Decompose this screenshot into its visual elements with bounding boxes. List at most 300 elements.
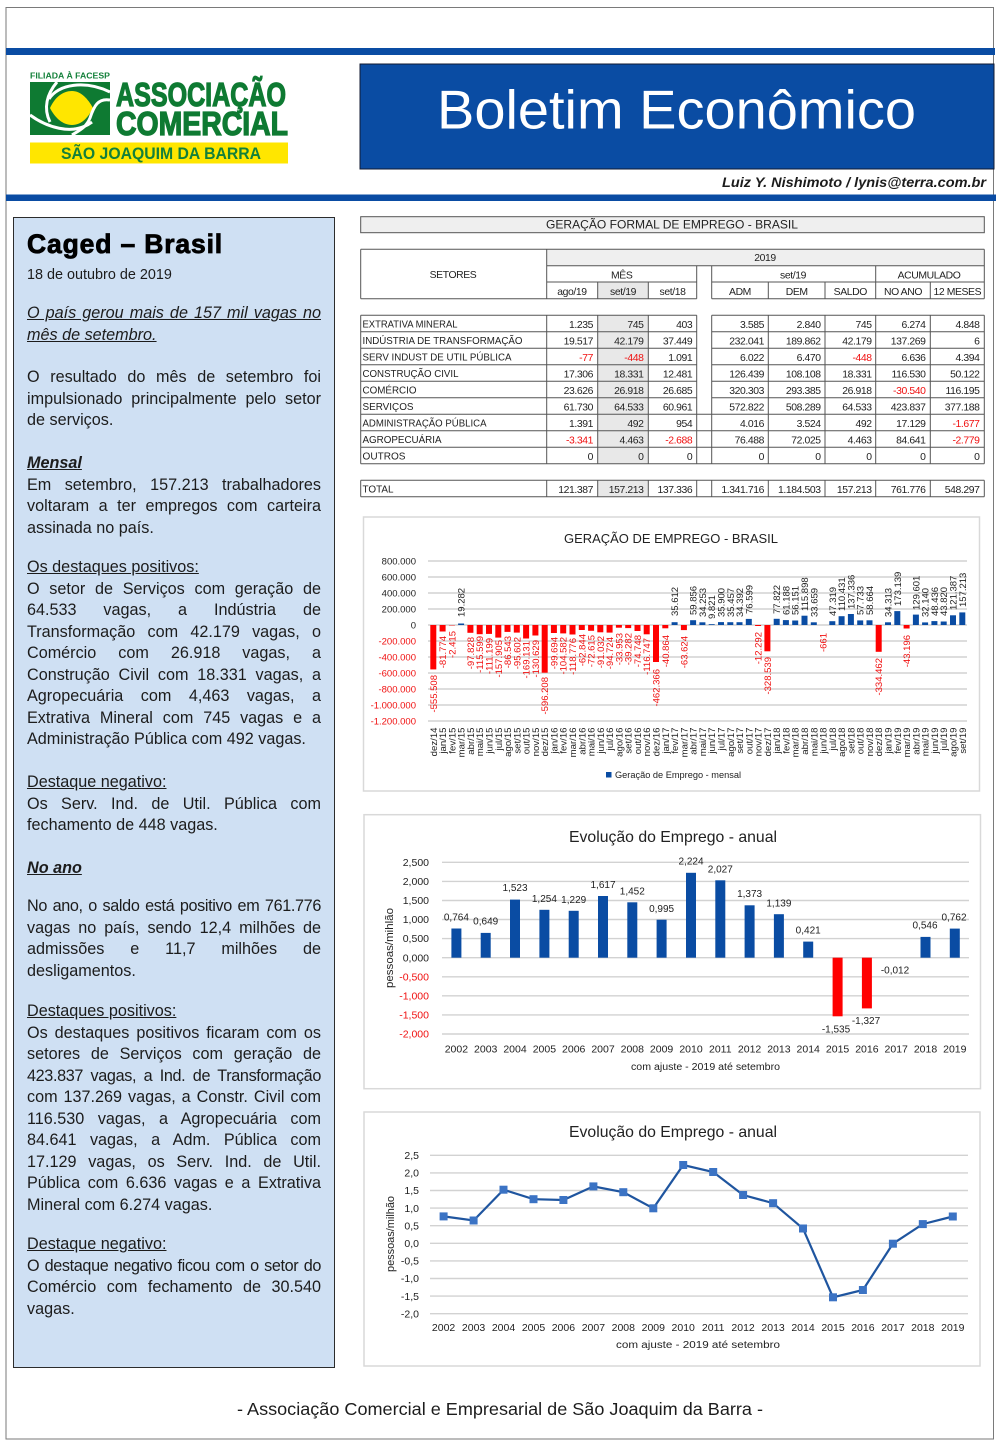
table body: -2.688 xyxy=(665,436,693,446)
month axis labels: nov/15 xyxy=(531,728,542,756)
month axis labels: jul/19 xyxy=(939,728,950,751)
chart note: com ajuste - 2019 até setembro xyxy=(631,1062,780,1073)
month axis labels: dez/18 xyxy=(874,728,885,756)
title banner xyxy=(360,64,994,169)
table body: 1.184.503 xyxy=(778,485,821,496)
table header: ago/19 xyxy=(557,287,587,298)
table header: DEM xyxy=(786,287,808,298)
table body: -30.540 xyxy=(893,386,926,397)
text block: yearly summary xyxy=(27,897,321,980)
positive data labels: 59.856 xyxy=(689,586,700,615)
table body: 4.016 xyxy=(740,419,765,430)
y axis labels: -1,5 xyxy=(401,1291,419,1303)
table body: SERV INDUST DE UTIL PÚBLICA xyxy=(362,350,512,364)
y axis labels: -200.000 xyxy=(378,636,416,648)
table body: 492 xyxy=(856,419,872,430)
y axis labels: -2,000 xyxy=(399,1028,429,1040)
y axis labels: 0,500 xyxy=(403,933,429,945)
logo: Associação Comercial xyxy=(30,70,288,164)
positive data labels: 110.431 xyxy=(837,577,848,611)
text block: monthly negative highlight: Destaque negativo: xyxy=(27,773,166,791)
month axis labels: fev/19 xyxy=(893,728,904,754)
data labels: -0,012 xyxy=(881,966,910,976)
negative data labels: -118.776 xyxy=(568,638,579,675)
chart title: GERAÇÃO DE EMPREGO - BRASIL xyxy=(564,531,778,546)
negative data labels: -111.199 xyxy=(484,638,496,674)
table body: TOTAL xyxy=(362,484,394,496)
y axis labels: 600.000 xyxy=(382,572,416,584)
year axis labels: 2018 xyxy=(911,1322,935,1334)
table body: EXTRATIVA MINERAL xyxy=(362,320,458,330)
month axis labels: jul/18 xyxy=(828,728,839,751)
data labels: 0,546 xyxy=(912,920,938,932)
y axis labels xyxy=(371,556,416,728)
positive data labels: 35.612 xyxy=(670,587,681,616)
panel: annual employment line chart xyxy=(364,1112,980,1366)
y axis labels: -800.000 xyxy=(378,684,416,696)
year axis labels xyxy=(432,1322,965,1334)
table body: 12.481 xyxy=(663,370,693,380)
y axis labels: -1.200.000 xyxy=(371,716,416,728)
table body: 403 xyxy=(676,320,693,331)
negative data labels: -104.582 xyxy=(559,637,570,675)
year axis labels: 2009 xyxy=(650,1044,673,1056)
author credit: Luiz Y. Nishimoto / lynis@terra.com.br xyxy=(722,174,988,190)
positive data labels: 34.392 xyxy=(735,588,746,617)
table body: 6 xyxy=(974,336,980,348)
positive bars xyxy=(451,873,960,958)
table body: 1.391 xyxy=(569,419,594,430)
text block: yearly positive highlights: 116.530 vagas, a Agropecuária com xyxy=(27,1110,321,1128)
positive data labels: 58.664 xyxy=(865,586,876,615)
month axis labels: out/15 xyxy=(522,728,533,754)
table body: 157.213 xyxy=(609,485,644,496)
month axis labels: abr/15 xyxy=(466,728,477,755)
table body: 18.331 xyxy=(614,370,644,380)
year axis labels: 2006 xyxy=(562,1044,586,1056)
y axis labels: 400.000 xyxy=(382,588,416,600)
text block: monthly positive highlights: 64.533 vagas, a Indústria de xyxy=(27,601,321,619)
table body: COMÉRCIO xyxy=(362,384,416,396)
negative data labels: -12.292 xyxy=(754,632,765,664)
table body: 17.129 xyxy=(896,419,926,430)
y axis labels: -0,5 xyxy=(401,1256,419,1268)
table body: 0 xyxy=(920,452,926,463)
text block: monthly positive highlights: Comércio com 26.918 vagas, a xyxy=(27,644,321,662)
positive data labels xyxy=(457,572,969,619)
positive data labels: 19.282 xyxy=(457,588,468,617)
data labels: 1,523 xyxy=(502,883,528,894)
y axis labels: -1,500 xyxy=(399,1010,429,1022)
panel: Caged Brasil text xyxy=(13,217,335,1368)
negative data labels: -63.624 xyxy=(679,636,690,668)
text block: lead: O país gerou mais de 157 mil vagas no xyxy=(27,304,321,322)
text block: mensal: Em setembro, 157.213 trabalhadores xyxy=(27,476,321,494)
table body xyxy=(361,315,984,497)
data labels: 1,452 xyxy=(620,886,645,898)
text block: yearly positive highlights: 17.129 vagas, os Serv. Ind. de Util. xyxy=(27,1153,321,1171)
negative data labels: -116.747 xyxy=(642,638,653,675)
y axis labels: 0 xyxy=(411,620,416,632)
table body: ADMINISTRAÇÃO PÚBLICA xyxy=(362,416,487,430)
data labels: 0,421 xyxy=(796,926,821,936)
positive data labels: 77.822 xyxy=(772,585,783,614)
text block: yearly negative highlight: O destaque negativo ficou com o setor do xyxy=(27,1257,321,1275)
negative data labels: -74.748 xyxy=(633,635,644,667)
year axis labels: 2013 xyxy=(761,1322,785,1334)
table body: 745 xyxy=(627,320,644,331)
month axis labels: jan/18 xyxy=(772,728,783,755)
positive data labels: 47.319 xyxy=(828,587,839,616)
text block: yearly positive highlights: com 137.269 vagas, a Constr. Civil com xyxy=(27,1088,321,1106)
table body: 76.488 xyxy=(735,436,765,446)
y axis labels: 2,000 xyxy=(403,876,429,888)
positive data labels: 61.188 xyxy=(781,586,792,615)
month axis labels: fev/17 xyxy=(670,728,681,754)
month axis labels: abr/18 xyxy=(800,728,811,755)
month axis labels: jul/17 xyxy=(716,728,728,751)
text block: monthly negative highlight: Os Serv. Ind. de Util. Pública com xyxy=(27,795,321,813)
year axis labels: 2014 xyxy=(797,1044,820,1056)
year axis labels: 2004 xyxy=(503,1044,527,1056)
table body: 3.585 xyxy=(740,320,765,331)
month axis labels: ago/15 xyxy=(503,728,514,757)
month axis labels xyxy=(429,727,969,757)
y axis labels: 2,5 xyxy=(404,1150,419,1162)
table body: 108.108 xyxy=(786,370,821,380)
negative data labels: -43.196 xyxy=(902,635,913,667)
title banner: Boletim Econômico xyxy=(437,78,916,140)
negative data labels: -555.508 xyxy=(429,675,440,713)
negative data labels: -596.208 xyxy=(540,677,551,715)
negative data labels: -169.131 xyxy=(522,641,533,679)
data labels xyxy=(444,856,967,1036)
panel: bar chart geração de emprego mensal xyxy=(364,517,980,791)
table header: ACUMULADO xyxy=(898,270,961,282)
y axis labels: 0,000 xyxy=(403,952,429,964)
month axis labels: ago/19 xyxy=(948,728,960,757)
year axis labels: 2011 xyxy=(709,1044,732,1056)
text block: monthly positive highlights: O setor de Serviços com geração de xyxy=(27,580,321,598)
negative data labels: -157.905 xyxy=(494,640,505,678)
year axis labels: 2011 xyxy=(702,1322,725,1334)
month axis labels: out/17 xyxy=(744,728,755,754)
table body: 18.331 xyxy=(842,370,872,380)
table body: 320.303 xyxy=(729,386,765,397)
month axis labels: abr/17 xyxy=(689,728,700,755)
text block: summary xyxy=(27,368,321,429)
data labels: 0,649 xyxy=(473,916,499,928)
negative data labels: -86.543 xyxy=(503,636,514,668)
year axis labels: 2019 xyxy=(943,1044,967,1056)
text block: monthly negative highlight: fechamento de 448 vagas. xyxy=(27,816,218,834)
year axis labels xyxy=(445,1044,967,1056)
negative data labels: -97.828 xyxy=(466,637,477,669)
month axis labels: set/15 xyxy=(512,728,523,754)
positive data labels: 43.820 xyxy=(939,587,950,616)
text block: monthly positive highlights: Transformação com 42.179 vagas, o xyxy=(27,623,321,641)
table body: 0 xyxy=(638,452,644,463)
table body: 508.289 xyxy=(786,402,821,414)
subheading: no ano: No ano xyxy=(27,859,82,877)
table body: -3.341 xyxy=(566,436,594,446)
text block: mensal: Mensal xyxy=(27,454,82,472)
table body: 4.463 xyxy=(619,436,644,446)
y axis labels xyxy=(401,1150,419,1320)
y axis labels: -2,0 xyxy=(401,1308,419,1320)
year axis labels: 2017 xyxy=(885,1044,908,1056)
text block: yearly summary: desligamentos. xyxy=(27,962,136,980)
table body: 26.685 xyxy=(663,386,693,397)
y axis labels: 0,5 xyxy=(404,1220,419,1232)
text block: monthly negative highlight xyxy=(27,773,321,834)
data labels: 1,229 xyxy=(561,895,587,906)
data labels: 0,762 xyxy=(941,912,967,924)
heading: Caged – Brasil xyxy=(27,229,223,259)
table body: 26.918 xyxy=(614,386,644,397)
logo: Associação Comercial: SÃO JOAQUIM DA BARRA xyxy=(61,143,261,163)
text block: yearly positive highlights: Destaques positivos: xyxy=(27,1002,176,1020)
negative data labels: -94.724 xyxy=(605,637,616,669)
y axis labels: 2,0 xyxy=(404,1168,419,1180)
year axis labels: 2008 xyxy=(621,1044,644,1056)
data labels: 1,617 xyxy=(590,880,616,891)
month axis labels: fev/15 xyxy=(447,728,458,754)
negative data labels: -328.539 xyxy=(763,657,774,695)
month axis labels: ago/16 xyxy=(614,728,625,757)
y axis labels: -400.000 xyxy=(378,652,416,664)
table body: 1.341.716 xyxy=(721,485,765,496)
logo: Associação Comercial: COMERCIAL xyxy=(116,105,288,142)
text block: yearly negative highlight: Destaque negativo: xyxy=(27,1235,166,1253)
text block: monthly positive highlights: Administração Pública com 492 vagas. xyxy=(27,730,306,748)
table title: GERAÇÃO FORMAL DE EMPREGO - BRASIL xyxy=(546,219,799,232)
table body: 189.862 xyxy=(786,336,821,348)
table body: 64.533 xyxy=(614,402,644,414)
table body: 232.041 xyxy=(729,336,765,348)
month axis labels: mai/15 xyxy=(475,728,486,756)
negative data labels: -62.844 xyxy=(577,634,588,666)
year axis labels: 2012 xyxy=(738,1044,761,1056)
month axis labels: jun/18 xyxy=(819,728,830,755)
negative data labels: -99.694 xyxy=(549,637,560,669)
month axis labels: abr/19 xyxy=(911,728,922,755)
text block: mensal xyxy=(27,454,321,537)
table body: 42.179 xyxy=(614,336,644,348)
positive data labels: 129.601 xyxy=(911,576,922,610)
y axis labels: 0,0 xyxy=(404,1238,419,1250)
table body: -448 xyxy=(852,353,872,364)
table body: 0 xyxy=(588,452,594,463)
text block: lead xyxy=(27,304,321,344)
negative data labels: -2.415 xyxy=(447,631,458,658)
table body: AGROPECUÁRIA xyxy=(362,433,442,446)
text block: mensal: assinada no país. xyxy=(27,519,154,537)
data labels: -1,327 xyxy=(852,1016,881,1027)
table body: 37.449 xyxy=(663,336,693,348)
date: 18 de outubro de 2019 xyxy=(27,267,172,283)
chart title: Evolução do Emprego - anual xyxy=(569,829,777,846)
month axis labels: out/16 xyxy=(633,728,644,754)
month axis labels: out/18 xyxy=(856,728,867,754)
text block: monthly positive highlights: Construção Civil com 18.331 vagas, a xyxy=(27,666,321,684)
table body: 1.235 xyxy=(569,320,594,331)
year axis labels: 2012 xyxy=(731,1322,755,1334)
table: geração formal de emprego xyxy=(361,217,984,497)
table body: 72.025 xyxy=(791,436,821,446)
text block: mensal: voltaram a ter empregos com carteira xyxy=(27,497,321,515)
header rule bottom xyxy=(6,194,996,201)
month axis labels: fev/18 xyxy=(781,728,792,754)
positive data labels: 76.599 xyxy=(744,585,755,614)
month axis labels: dez/14 xyxy=(429,727,440,756)
table body: 2.840 xyxy=(797,320,821,331)
positive data labels: 34.313 xyxy=(884,588,894,617)
month axis labels: mar/16 xyxy=(568,728,579,757)
month axis labels: jul/15 xyxy=(494,728,505,751)
y axis labels: -600.000 xyxy=(378,668,416,680)
table body: 116.530 xyxy=(892,370,926,380)
month axis labels: mai/18 xyxy=(809,728,820,756)
y axis labels: 1,000 xyxy=(403,914,429,926)
positive data labels: 48.436 xyxy=(930,587,941,616)
year axis labels: 2002 xyxy=(445,1044,468,1056)
text block: summary: impulsionado principalmente pelo setor xyxy=(27,390,321,408)
data labels: 1,373 xyxy=(737,889,763,900)
y axis labels: 1,0 xyxy=(404,1203,419,1215)
table body: 1.091 xyxy=(668,353,693,364)
table body: 19.517 xyxy=(564,336,594,348)
year axis labels: 2017 xyxy=(881,1322,905,1334)
positive data labels: 56.151 xyxy=(791,586,802,615)
table body: 121.387 xyxy=(558,485,594,496)
table body: 0 xyxy=(687,452,693,463)
table body: CONSTRUÇÃO CIVIL xyxy=(362,367,459,380)
data labels: 0,764 xyxy=(444,912,469,924)
table body: 157.213 xyxy=(837,485,872,496)
month axis labels: nov/18 xyxy=(865,728,876,756)
month axis labels: dez/15 xyxy=(540,728,551,756)
month axis labels: mai/16 xyxy=(587,728,598,756)
footer: - Associação Comercial e Empresarial de São Joaquim da Barra - xyxy=(237,1399,763,1419)
data labels: 1,139 xyxy=(766,898,792,910)
positive data labels: 121.387 xyxy=(948,576,960,610)
table body: 64.533 xyxy=(842,402,872,414)
data labels: 0,995 xyxy=(649,904,675,915)
month axis labels: jan/17 xyxy=(661,728,672,755)
y axis labels: 800.000 xyxy=(382,556,416,568)
year axis labels: 2014 xyxy=(791,1322,815,1334)
year axis labels: 2016 xyxy=(855,1044,879,1056)
table header: set/19 xyxy=(780,270,807,282)
table header: set/19 xyxy=(610,287,637,298)
text block: yearly summary: vagas no país, sendo 12,4 milhões de xyxy=(27,919,321,937)
table body: 61.730 xyxy=(564,402,594,414)
negative data labels: -334.462 xyxy=(874,658,885,696)
y axis labels: 1,5 xyxy=(404,1185,419,1197)
table header: SETORES xyxy=(430,270,477,281)
text block: yearly negative highlight: Comércio com fechamento de 30.540 xyxy=(27,1278,321,1296)
positive data labels: 32.140 xyxy=(921,588,932,617)
text block: lead: mês de setembro. xyxy=(27,326,157,344)
month axis labels: set/17 xyxy=(735,728,746,754)
y axis labels: -1,0 xyxy=(401,1273,419,1285)
negative data labels: -33.953 xyxy=(614,633,625,665)
table body: 50.122 xyxy=(950,370,980,380)
text block: yearly positive highlights: setores de Serviços com geração de xyxy=(27,1045,321,1063)
table body: 116.195 xyxy=(946,386,980,397)
table body: 548.297 xyxy=(945,485,980,496)
positive data labels: 35.457 xyxy=(726,588,737,617)
table header: 2019 xyxy=(754,253,776,264)
month axis labels: set/19 xyxy=(958,728,969,754)
table header xyxy=(361,249,984,299)
line series xyxy=(444,1165,953,1297)
table body: 745 xyxy=(856,320,872,331)
table body: 84.641 xyxy=(896,436,926,446)
table body: 6.636 xyxy=(901,353,926,364)
table body: 4.848 xyxy=(955,320,980,331)
positive bars xyxy=(458,611,965,625)
chart note: com ajuste - 2019 até setembro xyxy=(616,1340,780,1351)
month axis labels: nov/16 xyxy=(642,728,653,756)
month axis labels: mai/19 xyxy=(921,728,932,756)
data labels: 2,224 xyxy=(678,856,704,868)
negative data labels: -72.615 xyxy=(587,635,598,667)
table body: 4.394 xyxy=(955,353,980,364)
negative data labels xyxy=(429,631,913,715)
table body: 6.470 xyxy=(797,353,821,364)
table header: 12 MESES xyxy=(933,287,982,298)
positive data labels: 57.733 xyxy=(856,586,867,615)
table body: 6.274 xyxy=(901,320,926,331)
year axis labels: 2015 xyxy=(821,1322,845,1334)
year axis labels: 2015 xyxy=(826,1044,849,1056)
month axis labels: jun/16 xyxy=(596,728,607,755)
month axis labels: ago/18 xyxy=(837,728,848,757)
month axis labels: jun/19 xyxy=(930,728,941,755)
month axis labels: dez/16 xyxy=(652,728,662,756)
month axis labels: mar/17 xyxy=(679,728,690,757)
y axis labels: -1,000 xyxy=(399,990,429,1002)
month axis labels: mar/19 xyxy=(902,728,913,757)
text block: yearly summary: admissões e 11,7 milhões de xyxy=(27,940,321,958)
month axis labels: mar/18 xyxy=(791,728,802,757)
month axis labels: fev/16 xyxy=(559,728,570,754)
y axis labels: 1,500 xyxy=(403,895,429,907)
data labels: 2,027 xyxy=(708,864,733,876)
table body: -77 xyxy=(579,353,594,364)
table body: SERVIÇOS xyxy=(362,402,414,413)
table header: NO ANO xyxy=(884,287,922,298)
panel: annual employment bar chart xyxy=(364,815,980,1089)
month axis labels: jul/16 xyxy=(605,728,616,751)
negative data labels: -81.774 xyxy=(438,636,449,668)
table body: 423.837 xyxy=(891,402,926,414)
positive data labels: 173.139 xyxy=(893,572,904,606)
table body: 26.918 xyxy=(842,386,872,397)
table body: 0 xyxy=(974,452,980,463)
legend: Geração de Emprego - mensal xyxy=(615,770,741,780)
year axis labels: 2006 xyxy=(552,1322,575,1334)
table body: 23.626 xyxy=(564,386,594,397)
positive data labels: 9.821 xyxy=(707,595,718,619)
table body: 0 xyxy=(815,452,821,463)
positive data labels: 35.900 xyxy=(716,588,728,617)
table header: set/18 xyxy=(660,287,686,298)
text block: yearly negative highlight xyxy=(27,1235,321,1318)
table body: 954 xyxy=(676,419,693,430)
